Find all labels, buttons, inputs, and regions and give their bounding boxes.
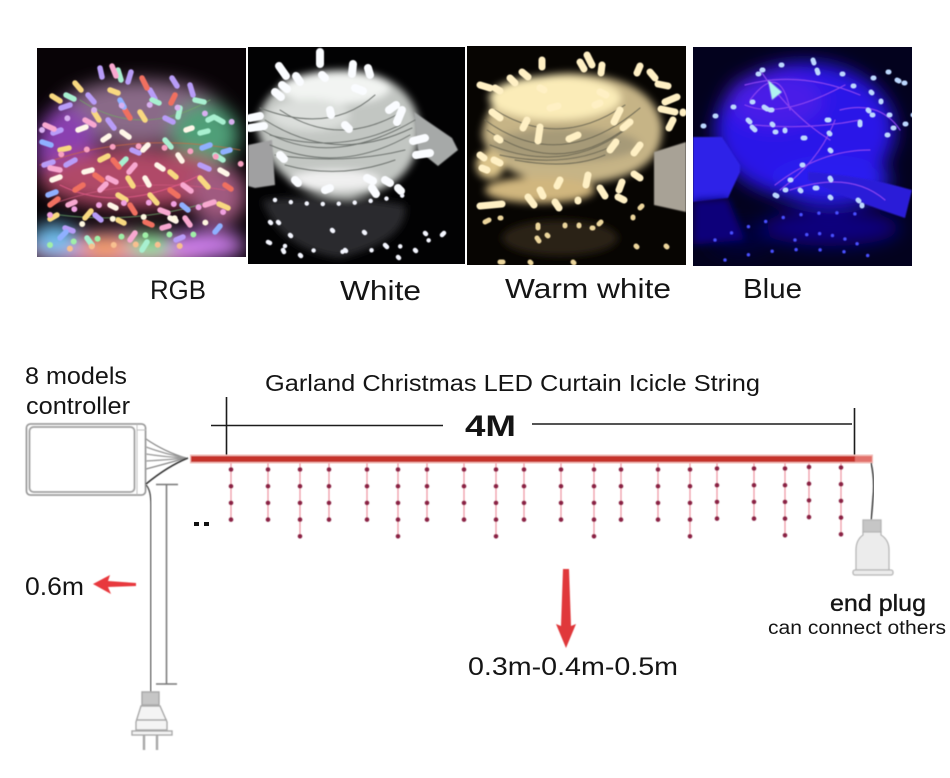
end plug cable bbox=[871, 463, 874, 520]
dimension: 4M length: 4M bbox=[465, 410, 516, 443]
title: Garland Christmas LED Curtain Icicle String bbox=[265, 370, 760, 396]
red main string bbox=[190, 454, 873, 464]
heading: 8 models controller: controller bbox=[26, 393, 130, 420]
icon: controller box bbox=[26, 424, 146, 495]
panel: white light photo bbox=[248, 47, 465, 264]
icon: power plug bbox=[132, 692, 172, 750]
panel: RGB light photo bbox=[37, 48, 246, 257]
power cable bbox=[146, 485, 151, 692]
arrow: left red bbox=[93, 575, 136, 594]
icon: end plug bbox=[853, 520, 893, 575]
icicle LED strands bbox=[231, 463, 841, 538]
panel: warm white light photo bbox=[467, 46, 686, 265]
label: can connect others: can connect others bbox=[768, 618, 946, 639]
heading: 8 models controller bbox=[25, 363, 130, 420]
label: RGB: RGB bbox=[150, 275, 206, 305]
heading: 8 models controller: 8 models bbox=[25, 363, 127, 390]
label: White: White bbox=[340, 275, 421, 306]
label: 0.6m: 0.6m bbox=[25, 573, 84, 601]
label: strand lengths: 0.3m-0.4m-0.5m bbox=[468, 653, 678, 681]
wires from controller to string bbox=[146, 439, 188, 484]
label: Warm white: Warm white bbox=[505, 273, 671, 304]
dimension: 4M length bbox=[211, 397, 854, 456]
dots: ellipsis bbox=[194, 522, 209, 526]
arrow: down red bbox=[556, 569, 576, 648]
dimension: 0.6m bbox=[156, 484, 178, 684]
label: end plug: end plug bbox=[830, 590, 926, 616]
panel: blue light photo bbox=[693, 47, 914, 266]
label: Blue: Blue bbox=[743, 273, 802, 304]
